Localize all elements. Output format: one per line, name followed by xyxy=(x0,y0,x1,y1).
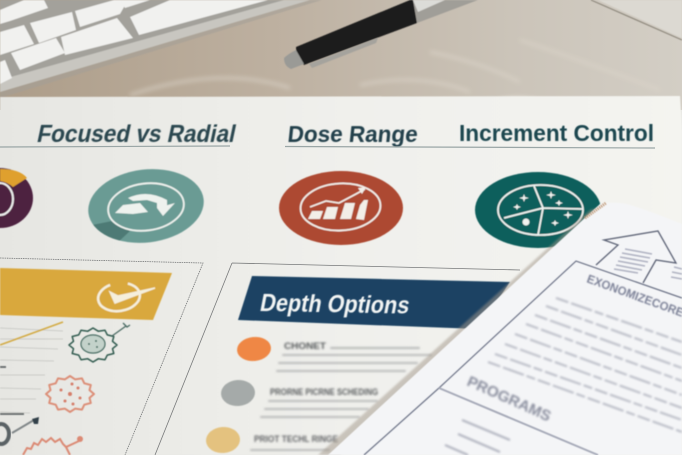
list item: orange dot: CHONET xyxy=(284,341,327,351)
icon: check mark xyxy=(96,280,155,314)
heading: Increment Control: Increment Control xyxy=(459,120,654,146)
icon: house arrow xyxy=(596,231,682,283)
icon: purple and yellow ring, cropped xyxy=(0,168,33,228)
banner: Depth Options xyxy=(238,276,510,329)
front document shadow xyxy=(318,205,608,455)
document body text xyxy=(488,298,682,432)
icon: bottom pink virus xyxy=(23,436,83,455)
list item: grey dot: PRORNE PICRNE SCHEDING xyxy=(270,387,378,397)
heading: Dose Range: Dose Range xyxy=(286,121,419,147)
banner label: Depth Options xyxy=(258,289,412,320)
icon: pink virus gear xyxy=(46,376,94,412)
panel: left treatment card outline xyxy=(0,258,203,455)
panel: front document xyxy=(328,203,682,455)
icon: red rising chart xyxy=(279,171,403,245)
icon: dark teal segmented wheel xyxy=(475,172,601,248)
panel: Depth Options card outline xyxy=(155,263,520,455)
document frame lines xyxy=(364,261,682,455)
document lower text xyxy=(445,420,510,455)
keyboard xyxy=(0,0,322,98)
list item: tan dot xyxy=(205,426,338,454)
heading: Focused vs Radial: Focused vs Radial xyxy=(35,121,238,148)
icon: green gear xyxy=(69,323,130,362)
paper sheet xyxy=(0,96,682,455)
keyboard keys xyxy=(0,0,268,84)
banner: yellow with check xyxy=(0,268,172,320)
icon: dark gear cropped xyxy=(0,424,9,444)
list item: grey dot xyxy=(220,379,378,418)
pen xyxy=(284,0,478,69)
icon: teal radial arrow xyxy=(88,168,204,244)
chart lines with yellow trend xyxy=(0,322,63,433)
list item: tan dot: PRIOT TECHL RINGE xyxy=(254,434,338,444)
list item: orange dot xyxy=(236,335,432,372)
wood desk background xyxy=(0,0,682,110)
document subheading: PROGRAMS xyxy=(464,373,554,425)
heading underline xyxy=(0,146,655,148)
